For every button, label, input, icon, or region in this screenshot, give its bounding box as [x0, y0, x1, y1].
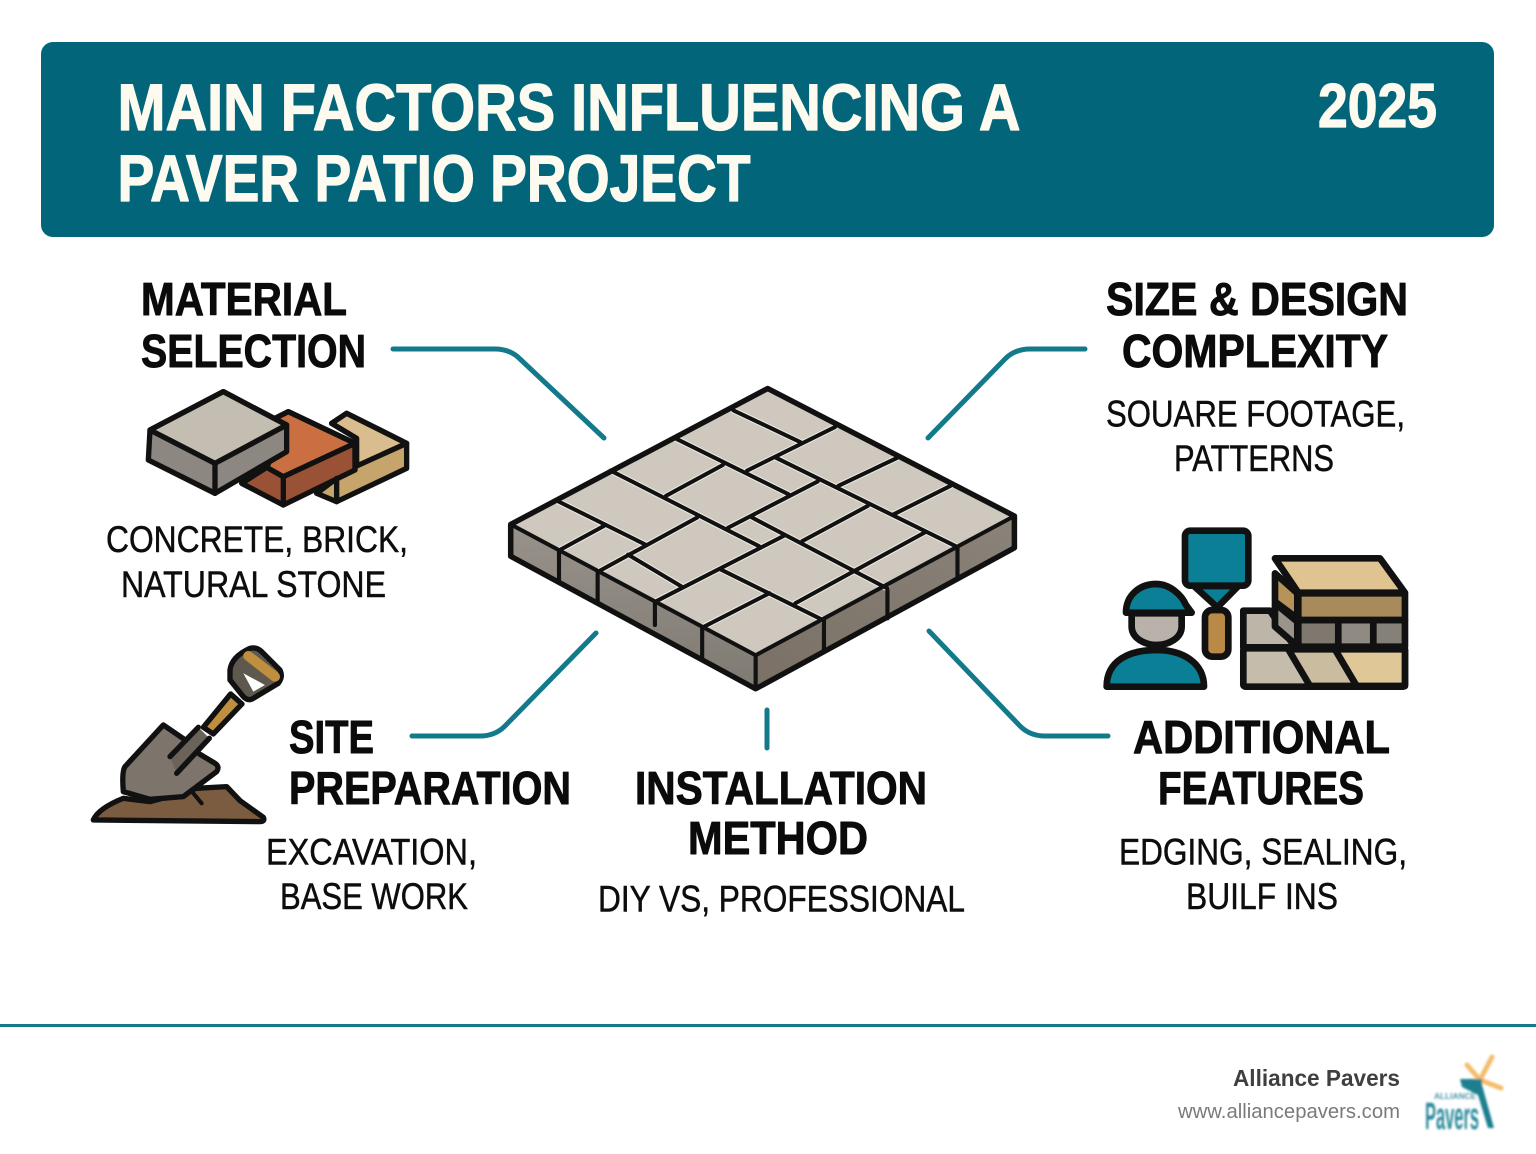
heading: site preparation: [289, 711, 571, 814]
heading: installation method: METHOD: [688, 812, 868, 864]
connector: installation method: [764, 710, 770, 748]
panel: additional features: [1107, 531, 1407, 917]
brand url: www.alliancepavers.com: [1177, 1101, 1400, 1123]
description: additional features: [1119, 832, 1407, 917]
description: site preparation: [266, 832, 477, 917]
heading: installation method: INSTALLATION: [635, 762, 927, 814]
heading: site preparation: SITE: [289, 711, 374, 763]
icon: paver blocks: [148, 392, 407, 505]
heading: size and design: [1106, 273, 1408, 377]
footer brand: [1177, 1057, 1501, 1138]
heading: material selection: SELECTION: [141, 325, 366, 377]
icon: company logo: ALLIANCE: [1434, 1092, 1477, 1101]
icon: company logo: [1425, 1057, 1501, 1138]
panel: installation method: [598, 762, 965, 920]
central paver patio illustration: [511, 388, 1014, 689]
description: site preparation: EXCAVATION,: [266, 832, 477, 872]
connector: site preparation: [412, 633, 596, 736]
description: size and design: PATTERNS: [1174, 438, 1334, 479]
brand name: Alliance Pavers: [1233, 1065, 1400, 1091]
heading: installation method: [635, 762, 927, 864]
connector: size and design: [928, 349, 1085, 438]
description: material selection: [106, 519, 408, 605]
heading: material selection: [141, 273, 366, 377]
description: additional features: BUILF INS: [1186, 876, 1338, 917]
connector: material selection: [393, 349, 604, 438]
panel: size and design complexity: [1106, 273, 1408, 479]
description: additional features: EDGING, SEALING,: [1119, 832, 1407, 872]
heading: additional features: FEATURES: [1158, 762, 1364, 814]
footer divider: [0, 1024, 1536, 1027]
title: MAIN FACTORS INFLUENCING A: [118, 70, 1020, 144]
panel: site preparation: [93, 648, 571, 917]
heading: additional features: ADDITIONAL: [1133, 711, 1390, 763]
description: site preparation: BASE WORK: [280, 876, 468, 917]
icon: worker, trowel and bricks: [1107, 531, 1405, 687]
description: material selection: NATURAL STONE: [121, 564, 386, 605]
title: [118, 70, 1020, 215]
heading: size and design: COMPLEXITY: [1122, 325, 1388, 377]
year: 2025: [1318, 72, 1437, 141]
connector: additional features: [929, 631, 1108, 736]
heading: site preparation: PREPARATION: [289, 762, 571, 814]
description: size and design: SOUARE FOOTAGE,: [1106, 394, 1405, 434]
panel: material selection: [106, 273, 408, 605]
heading: material selection: MATERIAL: [141, 273, 347, 325]
title: PAVER PATIO PROJECT: [118, 141, 750, 215]
description: material selection: CONCRETE, BRICK,: [106, 519, 408, 560]
icon: shovel in soil: [93, 648, 281, 822]
description: installation method: DIY VS, PROFESSIONAL: [598, 878, 965, 920]
heading: size and design: SIZE & DESIGN: [1106, 273, 1408, 325]
heading: additional features: [1133, 711, 1390, 814]
description: size and design: [1106, 394, 1405, 479]
header banner: [41, 42, 1494, 237]
